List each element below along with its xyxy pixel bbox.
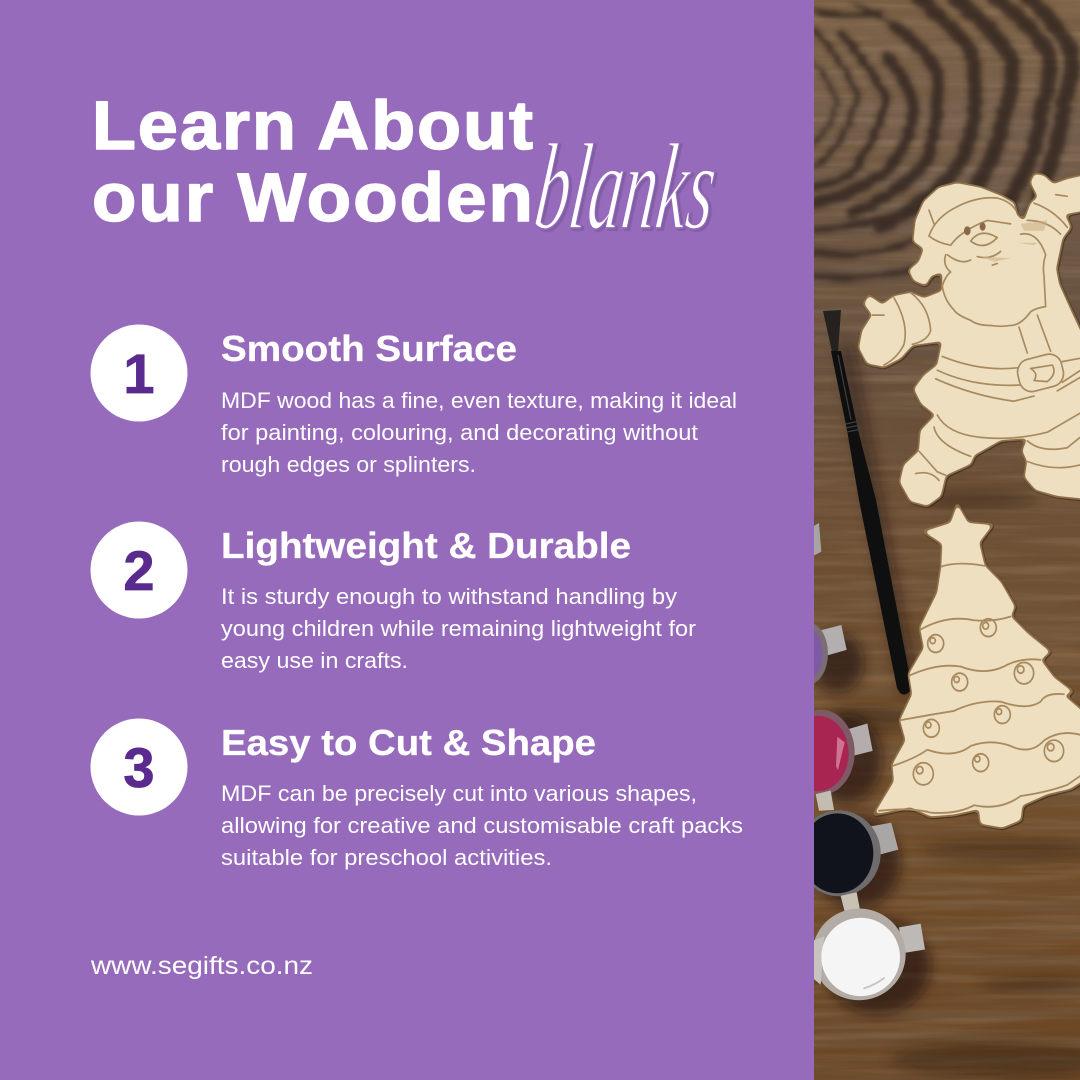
number badge 2: 2: [123, 539, 155, 602]
santa eyes: [964, 222, 986, 235]
title line 1: Learn About: [92, 87, 535, 164]
silver tab top edge: [814, 523, 821, 556]
description 3: suitable for preschool activities.: [221, 845, 552, 870]
description 1: [221, 388, 737, 477]
item 2: lightweight and durable: [90, 522, 696, 673]
description 2: [221, 584, 696, 673]
item 3: easy to cut and shape: [90, 718, 743, 870]
description 3: MDF can be precisely cut into various shapes,: [221, 781, 697, 806]
photo panel: wooden craft blanks on table: [786, 0, 1080, 1080]
description 1: for painting, colouring, and decorating without: [221, 420, 698, 445]
description 2: It is sturdy enough to withstand handling by: [221, 584, 677, 609]
title line 2: our Wooden: [92, 159, 535, 236]
heading 2: Lightweight & Durable: [221, 525, 631, 566]
christmas tree wooden blank: [874, 504, 1080, 827]
santa silhouette: [859, 174, 1080, 506]
santa beard shading: [981, 220, 1047, 262]
white pot: [812, 908, 925, 1000]
black pot: [814, 810, 898, 911]
purple pot: [814, 624, 847, 684]
santa engraved details: [872, 195, 1080, 480]
crimson pot: [814, 710, 873, 811]
paint pots: [814, 523, 937, 1022]
tree garlands and baubles: [879, 564, 1080, 813]
tree silhouette: [874, 504, 1080, 827]
description 3: allowing for creative and customisable craft packs: [221, 813, 743, 838]
number badge 2: [90, 522, 188, 618]
paintbrush: [823, 310, 918, 698]
description 3: [221, 781, 743, 870]
wood table background: [814, 0, 1080, 1080]
number badge 3: 3: [123, 736, 155, 799]
description 2: young children while remaining lightweight for: [221, 616, 696, 641]
number badge 3: [90, 718, 188, 816]
warm dark table patches: [825, 491, 1080, 1078]
title: [92, 87, 723, 255]
number badge 1: 1: [123, 342, 155, 405]
heading 3: Easy to Cut & Shape: [221, 722, 596, 763]
description 1: rough edges or splinters.: [221, 452, 476, 477]
item 1: smooth surface: [90, 324, 737, 477]
description 1: MDF wood has a fine, even texture, making it ideal: [221, 388, 737, 413]
santa wooden blank: [859, 174, 1080, 506]
pot shadows: [811, 633, 931, 1014]
heading 1: Smooth Surface: [221, 328, 517, 369]
number badge 1: [90, 324, 188, 422]
purple background panel: [0, 0, 814, 1080]
description 2: easy use in crafts.: [221, 648, 408, 673]
script word: blanks: blanks: [529, 118, 723, 255]
website url: www.segifts.co.nz: [90, 952, 313, 980]
